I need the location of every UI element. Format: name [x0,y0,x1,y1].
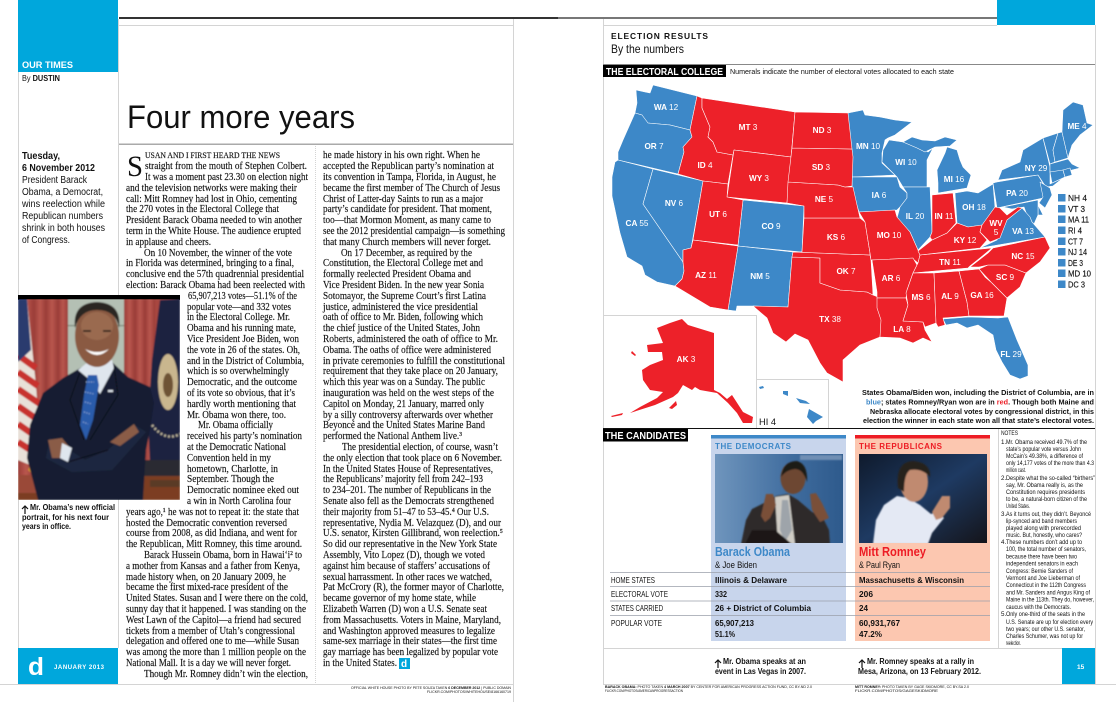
map: state labels: KS 6 [827,233,846,242]
map: state labels: NE 5 [815,195,834,204]
map: state labels: UT 6 [709,210,727,219]
notes column: As it turns out, they didn’t. Beyoncé [1006,511,1091,518]
map: state labels: TN 11 [939,258,961,267]
footer: folio January 2013 [18,648,118,684]
article body text: Though Mr. Romney didn’t win the election, [144,669,308,680]
article body text [126,150,506,680]
notes column: NOTES [1001,430,1018,437]
legend: small states: NJ 14 [1068,247,1087,257]
notes column: 2. [1001,475,1006,482]
map explanation note: Nebraska allocate electoral votes by congressional district, in this [870,407,1094,416]
article body text: Vice President Joe Biden, won [187,334,300,345]
results table: 332 [715,589,727,599]
notes column: played along with prerecorded [1006,525,1081,532]
article body text: from Massachusetts. Voters in Maine, Maryland, [323,615,501,626]
map: state labels: VA 13 [1012,227,1034,236]
panel: the Republicans [855,435,990,641]
article body text: that many Church members will never forget. [323,237,491,248]
article body text: and the television networks were making their [126,183,297,194]
map: state labels: CO 9 [761,222,781,231]
section tab: Our Times: OUR TIMES [22,60,73,71]
map: inset frames [603,316,828,428]
results table: Massachusetts & Wisconsin [859,575,964,585]
label: Hawaii: HI 4 [759,417,776,427]
article body text: It was a moment past 23.30 on election night [145,172,308,183]
map: red states (Romney/Ryan) [611,96,1050,423]
photo credit: portrait: FLICKR.COM/PHOTOS/WHITEHOUSE/8166160719 [427,690,511,694]
sidebar summary: shrink in both houses [22,223,105,234]
article body text: in the Electoral College. Mr. [187,312,290,323]
heading: the electoral college: Numerals indicate the number of electoral votes allocated to each state [730,67,954,76]
map: state labels: 5 [994,228,999,237]
map: state labels: MS 6 [911,293,931,302]
article body text: party’s candidate for president. That moment, [323,204,492,215]
article body text: in the United States. [323,658,397,669]
article body text: and in the District of Columbia, [187,356,304,367]
photo credit: Romney: FLICKR.COM/PHOTOS/GAGESKIDMORE [855,689,939,693]
article body text: Democratic, and the outcome [187,377,297,388]
article body text: a win in North Carolina four [187,496,291,507]
notes column: 100, the total number of senators, [1006,546,1086,553]
map: state labels: NY 29 [1025,164,1048,173]
caption: Romney photo [858,657,981,676]
article body text: United States. Susan and I were there on the cold, [126,593,308,604]
article body text: USAN AND I FIRST HEARD THE NEWS [145,151,280,160]
map: state labels: IN 11 [935,212,954,221]
article body text: National Mall. It is a day we will never forget. [126,658,291,669]
notes column: only 14,177 votes of the more than 4.3 [1006,460,1094,467]
panel: the Democrats: & Joe Biden [715,560,757,570]
map: state labels: LA 8 [893,325,911,334]
section tab: Our Times [18,0,118,72]
article body text: hometown, Charlotte, in [187,464,279,475]
notes column: two years; our other U.S. senator, [1006,626,1085,633]
photo: official portrait of Obama [18,295,180,500]
sidebar summary: wins reelection while [21,199,105,210]
map explanation note: States Obama/Biden won, including the District of Columbia, are in [862,388,1094,397]
map: state labels: WV [989,219,1003,228]
byline: By DUSTIN [22,74,60,83]
article body text: at the Democratic National [187,442,286,453]
map: state labels: WA 12 [654,103,679,112]
article body text: he made history in his own right. When he [323,150,480,161]
article body text: Elizabeth Warren (D) won a U.S. Senate seat [323,604,487,615]
article body text: straight from the mouth of Stephen Colbert. [145,161,307,172]
article body text: Roberts, administered the oath of office to Mr. [323,334,498,345]
article body text: hardly worth mentioning that [187,399,296,410]
notes column: U.S. Senate are up for election every [1006,619,1094,626]
article body text: Mr. Obama officially [198,420,274,431]
legend: small states: MD 10 [1068,268,1091,278]
article body text: which is so overwhelmingly [187,366,290,377]
caption: portrait: years in office. [22,522,71,531]
article body text: September. Though the [187,474,274,485]
caption: Obama photo [715,657,806,676]
notes column [1001,430,1095,647]
legend: small states: RI 4 [1068,226,1082,236]
end mark: d logo [399,658,410,670]
article body text: sexual harrassment. In other races we watched, [323,572,492,583]
notes column: Connecticut in the 112th Congress [1006,582,1086,589]
caption: portrait [22,503,115,531]
legend: small states: VT 3 [1068,204,1085,214]
folio: page 15 [1062,648,1095,684]
notes column: 3. [1001,511,1006,518]
legend: small states: NH 4 [1068,193,1087,203]
heading: the candidates: THE CANDIDATES [605,431,686,442]
notes column: Charles Schumer, was not up for [1006,633,1083,640]
notes column: Mr. Obama received 49.7% of the [1006,439,1087,446]
article body text: oath of office to Mr. Biden, following which [323,312,484,323]
map: state labels: IA 6 [872,191,887,200]
article body text: formally reelected President Obama and [323,269,472,280]
folio: page 15: 15 [1077,664,1085,671]
article body text: performed the National Anthem live.³ [323,431,462,442]
article body text: On 10 November, the winner of the vote [144,248,292,259]
results table: 60,931,767 [859,618,900,628]
map: state labels: NM 5 [750,272,770,281]
panel: the Democrats: THE DEMOCRATS [715,442,792,451]
article body text: the chief justice of the United States, John [323,323,481,334]
map: state labels: NV 6 [665,199,684,208]
notes column: reelection. [1006,640,1021,647]
article body text: Mr. Obama won there, too. [187,410,286,421]
map: state labels: ID 4 [697,161,713,170]
map: state labels: SC 9 [996,273,1015,282]
map: state labels: IL 20 [906,212,925,221]
section heading: election results [611,31,708,56]
photo credit: Obama: FLICKR.COM/PHOTOS/AMERICANPROGRESSACTION [605,689,683,693]
article body text: sunny day that it happened. I was standing on the [126,604,306,615]
end mark: d logo: d [401,659,407,670]
article body text: call: Mitt Romney had lost in Ohio, cementing [126,194,298,205]
photo credit: Romney [855,685,969,693]
map: state labels: MO 10 [877,231,902,240]
map: state labels: AL 9 [941,292,959,301]
caption: Obama photo: event in Las Vegas in 2007. [715,667,806,676]
notes column: because there have been two [1006,554,1077,560]
caption: Romney photo: Mr. Romney speaks at a rally in [867,657,974,666]
notes column: state’s popular vote versus John [1006,446,1081,453]
map: state labels: TX 38 [819,315,841,324]
map: state labels: ND 3 [813,126,832,135]
panel: the Republicans: Mitt Romney [859,545,926,559]
map: state labels: AZ 11 [695,271,717,280]
legend: small states: DE 3 [1068,258,1083,268]
notes column: Congress: Bernie Sanders of [1006,568,1073,575]
notes column: 5. [1001,611,1006,618]
panel: the Democrats [711,435,846,641]
legend: small states [1058,193,1091,290]
notes column: These numbers don’t add up to [1006,539,1082,546]
article body text: Senate also fell as the Democrats strengthened [323,496,495,507]
article body text: 65,907,213 votes—51.1% of the [188,291,297,302]
sidebar summary: Tuesday, [22,151,60,162]
article body text: course from 2008, as did Indiana, and went for [126,528,297,539]
article body text: The presidential election, of course, wasn’t [342,442,498,453]
article body text: S [127,150,143,183]
legend: small states: MA 11 [1068,214,1089,224]
results table: 65,907,213 [715,618,754,628]
photo credit: Obama: BARACK OBAMA: PHOTO TAKEN 4 MARCH 2007 BY CENTER FOR AMERICAN PROGRESS ACTION FUND, CC BY-ND 2.0 [605,685,812,689]
notes column: independent senators in each [1006,560,1078,568]
map: Alaska [611,319,753,423]
article body text: So did our representative in the New York State [323,539,497,550]
article body text: the vote in 26 of the states. Oh, [187,345,300,356]
map: state labels: OH 18 [962,203,986,212]
article body text: too—that Mormon Moment, as many came to [323,215,491,226]
article body text: same-sex marriage in their states—the first time [323,636,497,647]
article body text: received his party’s nomination [187,431,303,442]
panel: the Democrats: Barack Obama [715,545,791,559]
legend: small states: CT 7 [1068,236,1083,246]
article body text: by a silly controversy afterwards over whether [323,410,493,421]
article body text: Convention held in my [187,453,272,464]
map: state labels: SD 3 [812,163,831,172]
article body text: its convention in Tampa, Florida, in August, he [323,172,496,183]
article body text: Obama. The oaths of office were administered [323,345,492,356]
article body text: to 234–201. The number of Republicans in the [323,485,491,496]
sidebar summary: Obama, a Democrat, [22,187,103,198]
article body text: delegation and offered one to me—while Susan [126,636,300,647]
article body text: Assembly, Vito Lopez (D), though we voted [323,550,486,561]
heading: the electoral college: THE ELECTORAL COLLEGE [606,67,723,78]
map: state labels: AK 3 [677,355,696,364]
notes column: Maine in the 113th. They do, however, [1006,596,1094,604]
article body text: term in the White House. The audience erupted [126,226,302,237]
article body text: justice, administered the vice presidential [322,302,478,313]
sidebar summary: of Congress. [22,235,70,246]
article body text: gay marriage has been legalized by popular vote [323,647,498,658]
article body text: the Republican, Mitt Romney, this time around. [126,539,302,550]
notes column: Only one-third of the seats in the [1006,611,1085,618]
map: state labels: CA 55 [626,219,649,228]
map: state labels: ME 4 [1067,122,1087,131]
article body text: became governor of my home state, while [323,593,476,604]
map: Hawaii [759,386,823,424]
article body text: U.S. senator, Kirsten Gillibrand, won reelection.⁵ [323,528,503,539]
article body text: which this year was on a Sunday. The public [323,377,485,388]
article body text: West Lawn of the Capitol—a friend had secured [126,615,302,626]
article body text: Barack Hussein Obama, born in Hawai‘i² to [144,550,302,561]
article body text: On 17 December, as required by the [341,248,472,259]
sidebar summary: President Barack [22,175,88,186]
notes column: million cast. [1006,467,1026,474]
map explanation note: blue; states Romney/Ryan won are in red. Though both Maine and [866,398,1094,406]
notes column: 4. [1001,539,1006,546]
notes column: music. But, honestly, who cares? [1006,532,1082,539]
article body text: the Republicans’ majority fell from 242–193 [323,474,483,485]
article body text: made history when, on 20 January 2009, he [126,572,286,583]
photo credit: Obama [605,685,812,693]
results table: HOME STATES [611,575,655,585]
map: state labels [626,103,1087,364]
article body text: Beyoncé and the United States Marine Band [323,420,486,431]
footer: folio January 2013: d [28,653,44,681]
article body text: the 270 votes in the Electoral College that [126,204,279,215]
photo: Obama speaking [715,454,843,544]
map: state labels: MT 3 [739,123,758,132]
caption: portrait: Mr. Obama’s new official [30,503,115,512]
article body text: President Barack Obama needed to win another [126,215,302,226]
panel: the Republicans: THE REPUBLICANS [859,442,943,451]
heading: the electoral college [603,65,954,78]
map: state labels: OR 7 [644,142,664,151]
results table: 47.2% [859,629,883,639]
article body text: the only election that took place on 6 November. [323,453,502,464]
article body text: requirement that they take place on 20 January, [323,366,498,377]
article body text: Sotomayor, the Supreme Court’s first Latina [323,291,486,302]
map: state labels: PA 20 [1006,189,1028,198]
map: state labels: WY 3 [749,174,769,183]
map explanation note [862,388,1094,425]
article body text: hosted the Democratic convention reversed [126,518,288,529]
results table: 26 + District of Columbia [715,603,811,613]
article body text: was among the more than 1 million people on the [126,647,306,658]
photo credit: portrait: OFFICIAL WHITE HOUSE PHOTO BY PETE SOUZA TAKEN 6 DECEMBER 2012 | PUBLIC DOMAIN [351,686,511,690]
legend: small states: DC 3 [1068,280,1085,290]
notes column: to be, a natural-born citizen of the [1006,496,1087,503]
article body text: Pat McCrory (R), the former mayor of Charlotte, [323,582,504,593]
article body text: conclusive end the 57th quadrennial presidential [126,269,304,280]
photo credit: Romney: MITT ROMNEY: PHOTO TAKEN BY GAGE SKIDMORE, CC BY-SA 2.0 [855,685,969,689]
map: state labels: OK 7 [836,267,856,276]
results table: 24 [859,603,868,613]
map: state labels: MN 10 [856,142,881,151]
photo credit: portrait [351,686,511,694]
results table: POPULAR VOTE [611,618,662,628]
article body text: Capitol on Monday, 21 January, marred only [323,399,485,410]
article body text: election: Barack Obama had been reelected with [126,280,306,291]
notes column: caucus with the Democrats. [1006,604,1071,611]
caption: portrait: portrait, for his next four [22,513,109,522]
footer: folio January 2013: JANUARY 2013 [54,665,105,671]
results table: 206 [859,589,873,599]
article body text: Christ of Latter-day Saints to run as a major [323,194,483,205]
article body text: became the first member of The Church of Jesus [323,183,500,194]
corner tab: right page [997,0,1095,25]
results table: ELECTORAL VOTE [611,589,668,599]
map: state labels: AR 6 [882,274,901,283]
sidebar summary [21,151,105,246]
article body text: and Washington approved measures to legalize [323,626,495,637]
notes column: say, Mr. Obama really is, as the [1006,482,1083,489]
results table: STATES CARRIED [611,603,663,613]
article body text: representative, Nydia M. Velazquez (D), and our [323,518,501,529]
article body text: in Florida was determined, bringing to a final, [126,258,294,269]
notes column: lip-synced and band members [1006,518,1077,525]
section heading: election results: By the numbers [611,42,684,56]
notes column: Constitution requires presidents [1006,489,1085,496]
caption: Romney photo: Mesa, Arizona, on 13 February 2012. [858,667,981,676]
map: state labels: KY 12 [954,236,977,245]
results table: Illinois & Delaware [715,575,787,585]
sidebar summary: Republican numbers [22,211,103,222]
notes column: 1. [1001,439,1006,446]
map: state labels: GA 16 [970,291,994,300]
article body text: their majority from 51–47 to 53–45.⁴ Our U.S. [323,507,489,518]
notes column: Vermont and Joe Lieberman of [1006,575,1080,582]
article body text: In the United States House of Representatives, [323,464,493,475]
article body text: Obama and his running mate, [187,323,296,334]
map: state labels: WI 10 [895,158,917,167]
map: state labels: NC 15 [1011,252,1035,261]
sidebar summary: 6 November 2012 [22,163,95,174]
article body text: inauguration was held on the west steps of the [323,388,494,399]
caption: Obama photo: Mr. Obama speaks at an [723,657,806,666]
photo: Romney speaking [859,454,987,544]
section heading: election results: ELECTION RESULTS [611,31,708,41]
map explanation note: election the winner in each state won all that state’s electoral votes. [863,416,1094,425]
map: blue states (Obama/Biden) [612,85,1093,424]
headline: Four more years [127,99,355,135]
article body text: became the first mixed-race president of the [126,582,288,593]
notes column: McCain’s 49.38%, a difference of [1006,453,1083,460]
article body text: against him because of staffers’ accusations of [323,561,490,572]
article body text: tickets from a member of Utah’s congressional [126,626,295,637]
notes column: Despite what the so-called “birthers” [1006,475,1095,482]
article body text: popular vote—and 332 votes [187,302,291,313]
article body text: Vice President Biden. In the new year Sonia [323,280,484,291]
article body text: in applause and cheers. [126,237,211,248]
notes column: and Mr. Sanders and Angus King of [1006,590,1090,596]
article body text: see the 2012 presidential campaign—is something [323,226,506,237]
article body text: of its vote so obvious, that it’s [187,388,295,399]
results table [611,575,964,639]
results table: 51.1% [715,629,735,639]
map: state labels: FL 29 [1000,350,1022,359]
article body text: in private ceremonies to fulfill the constitutional [323,356,505,367]
article body text: Constitution, the Electoral College met and [323,258,484,269]
article body text: accepted the Republican party’s nomination at [323,161,494,172]
article body text: years ago,¹ he was not to repeat it: the state that [126,507,299,518]
panel: the Republicans: & Paul Ryan [859,560,900,570]
article body text: a mother from Kansas and a father from Kenya, [126,561,300,572]
notes column: United States. [1006,503,1030,510]
article body text: Democratic nominee eked out [187,485,299,496]
map: state labels: MI 16 [944,175,965,184]
